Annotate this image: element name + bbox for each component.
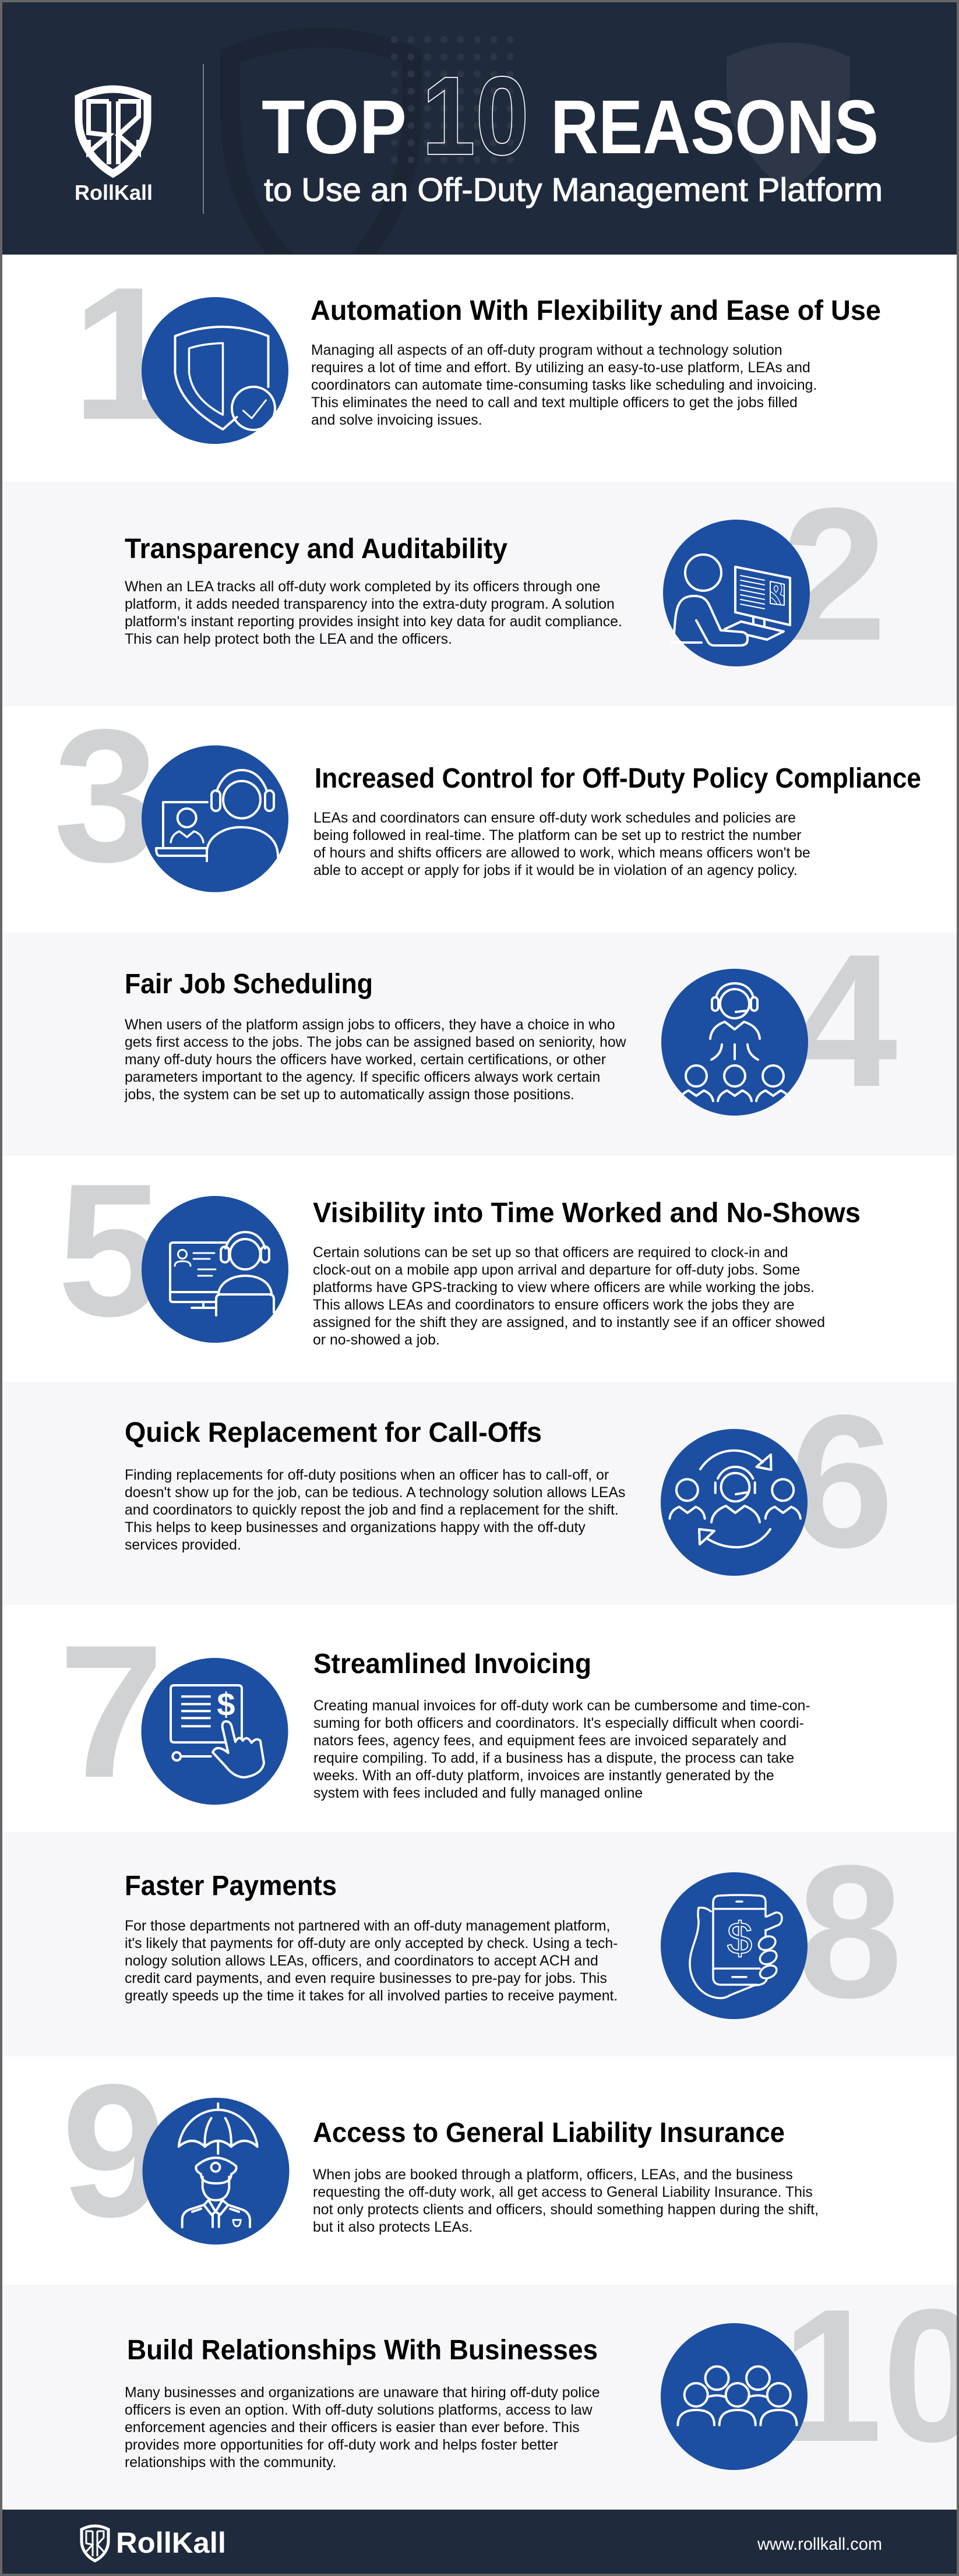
body text: For those departments not partnered with an off-duty management platform,: [125, 1918, 610, 1934]
body text: Managing all aspects of an off-duty program without a technology solution: [311, 343, 782, 358]
heading: Faster Payments: [125, 1871, 337, 1901]
body text: Finding replacements for off-duty positions when an officer has to call-off, or: [125, 1467, 609, 1483]
body text: being followed in real-time. The platform can be set up to restrict the number: [313, 828, 802, 844]
body text: system with fees included and fully managed online: [313, 1785, 643, 1801]
number 4: 4: [792, 915, 898, 1126]
icon: shield with check: [142, 297, 288, 444]
body text: it's likely that payments for off-duty are only accepted by check. Using a tech-: [125, 1936, 618, 1952]
body text: This can help protect both the LEA and the officers.: [125, 631, 452, 647]
logo: RollKall shield: [75, 89, 153, 204]
title: REASONS: [551, 84, 879, 170]
website: www.rollkall.com: [757, 2535, 882, 2554]
panel: footer: [2, 2510, 957, 2574]
body text: coordinators can automate time-consuming tasks like scheduling and invoicing.: [311, 377, 817, 393]
body text: clock-out on a mobile app upon arrival and departure for off-duty jobs. Some: [313, 1262, 800, 1278]
number 7: 7: [59, 1605, 164, 1817]
body text: credit card payments, and even require businesses to pre-pay for jobs. This: [125, 1971, 607, 1986]
icon: invoice with pointing hand: [141, 1658, 288, 1805]
heading: Automation With Flexibility and Ease of Use: [311, 295, 881, 326]
title: 10: [422, 53, 529, 178]
body text: able to accept or apply for jobs if it would be in violation of an agency policy.: [313, 863, 798, 878]
body text: nology solution allows LEAs, officers, and coordinators to accept ACH and: [125, 1953, 598, 1969]
footer wordmark: RollKall: [116, 2526, 226, 2559]
heading: Streamlined Invoicing: [313, 1649, 591, 1679]
title: TOP: [262, 84, 407, 170]
body text: suming for both officers and coordinators. It's especially difficult when coordi-: [313, 1716, 804, 1731]
icon: operator at monitor: [142, 1196, 288, 1343]
panel: reason 5: [2, 1144, 957, 1382]
title: [262, 53, 879, 178]
heading: Visibility into Time Worked and No-Shows: [313, 1198, 861, 1229]
panel: reason 4: [2, 915, 957, 1156]
body text: and solve invoicing issues.: [311, 412, 482, 428]
panel: reason 8: [2, 1826, 957, 2056]
body text: nators fees, agency fees, and equipment fees are invoiced separately and: [313, 1733, 787, 1749]
body text: and coordinators to quickly repost the job and find a replacement for the shift.: [125, 1502, 619, 1518]
icon: video call with headset: [142, 746, 288, 892]
subtitle: to Use an Off-Duty Management Platform: [264, 171, 883, 209]
body text: This helps to keep businesses and organizations happy with the off-duty: [125, 1520, 586, 1536]
body text: weeks. With an off-duty platform, invoices are instantly generated by the: [313, 1768, 774, 1784]
logo wordmark: RollKall: [75, 181, 153, 204]
body text: platform, it adds needed transparency into the extra-duty program. A solution: [125, 597, 615, 612]
body text: platform's instant reporting provides insight into key data for audit compliance.: [125, 614, 622, 630]
icon: hand holding phone: [661, 1872, 808, 2019]
body text: platforms have GPS-tracking to view where officers are while working the jobs.: [313, 1280, 815, 1296]
body text: relationships with the community.: [125, 2455, 336, 2471]
body text: Certain solutions can be set up so that officers are required to clock-in and: [313, 1245, 788, 1261]
body text: Creating manual invoices for off-duty work can be cumbersome and time-con-: [313, 1698, 810, 1714]
header divider: [203, 64, 204, 214]
heading: Fair Job Scheduling: [125, 969, 373, 1000]
icon: person at computer: [663, 520, 810, 666]
heading: Quick Replacement for Call-Offs: [125, 1417, 542, 1448]
panel: header: [2, 2, 957, 255]
number 3: 3: [54, 690, 158, 901]
body text: requesting the off-duty work, all get access to General Liability Insurance. This: [313, 2185, 813, 2200]
number 1: 1: [72, 248, 177, 459]
body text: gets first access to the jobs. The jobs can be assigned based on seniority, how: [125, 1035, 626, 1050]
number 9: 9: [62, 2045, 167, 2256]
number 5: 5: [58, 1144, 163, 1356]
body text: of hours and shifts officers are allowed to work, which means officers won't be: [313, 845, 810, 861]
dollar sign: $: [217, 1686, 235, 1723]
body text: many off-duty hours the officers have worked, certain certifications, or other: [125, 1052, 606, 1068]
icon: dispatcher assigning officers: [661, 969, 808, 1116]
dollar sign: $: [727, 1912, 752, 1964]
heading: Build Relationships With Businesses: [127, 2335, 598, 2366]
body text: greatly speeds up the time it takes for all involved parties to receive payment.: [125, 1988, 618, 2004]
footer logo shield: [82, 2526, 108, 2561]
body text: require compiling. To add, if a business has a dispute, the process can take: [313, 1751, 794, 1766]
body text: requires a lot of time and effort. By utilizing an easy-to-use platform, LEAs and: [311, 360, 810, 376]
panel: reason 1: [2, 248, 957, 482]
white separator above footer: [2, 2509, 957, 2510]
panel: reason 9: [2, 2045, 957, 2285]
body text: assigned for the shift they are assigned, and to instantly see if an officer showed: [313, 1315, 825, 1331]
body text: When users of the platform assign jobs to officers, they have a choice in who: [125, 1017, 615, 1033]
body text: or no-showed a job.: [313, 1332, 440, 1348]
panel: reason 2: [2, 468, 957, 706]
body text: officers is even an option. With off-duty solutions platforms, access to law: [125, 2402, 593, 2418]
body text: jobs, the system can be set up to automatically assign those positions.: [124, 1087, 574, 1103]
panel: reason 10: [2, 2270, 959, 2509]
icon: people rotation: [661, 1429, 808, 1576]
body text: This eliminates the need to call and text multiple officers to get the jobs filled: [311, 395, 798, 411]
body text: When jobs are booked through a platform, officers, LEAs, and the business: [313, 2167, 793, 2183]
body text: services provided.: [125, 1537, 241, 1553]
decorative background shields and dots: [220, 28, 850, 253]
heading: Access to General Liability Insurance: [313, 2118, 785, 2148]
heading: Transparency and Auditability: [125, 534, 507, 564]
icon: officer under umbrella: [142, 2098, 289, 2245]
body text: LEAs and coordinators can ensure off-duty work schedules and policies are: [313, 810, 796, 826]
body text: not only protects clients and officers, should something happen during the shift,: [313, 2202, 819, 2218]
number 8: 8: [798, 1826, 902, 2037]
body text: provides more opportunities for off-duty work and helps foster better: [125, 2437, 558, 2453]
body text: doesn't show up for the job, can be tedious. A technology solution allows LEAs: [125, 1485, 625, 1501]
panel: reason 7: [2, 1605, 957, 1832]
icon: group of people: [661, 2323, 808, 2470]
body text: enforcement agencies and their officers is easier than ever before. This: [125, 2420, 580, 2436]
body text: Many businesses and organizations are unaware that hiring off-duty police: [125, 2385, 600, 2401]
body text: but it also protects LEAs.: [313, 2219, 473, 2235]
body text: When an LEA tracks all off-duty work completed by its officers through one: [125, 579, 600, 595]
body text: parameters important to the agency. If specific officers always work certain: [125, 1070, 600, 1085]
number 6: 6: [789, 1375, 894, 1587]
panel: reason 3: [2, 690, 957, 933]
body text: This allows LEAs and coordinators to ensure officers work the jobs they are: [313, 1297, 795, 1313]
panel: reason 6: [2, 1375, 957, 1605]
number 2: 2: [782, 468, 887, 680]
heading: Increased Control for Off-Duty Policy Compliance: [315, 763, 921, 794]
